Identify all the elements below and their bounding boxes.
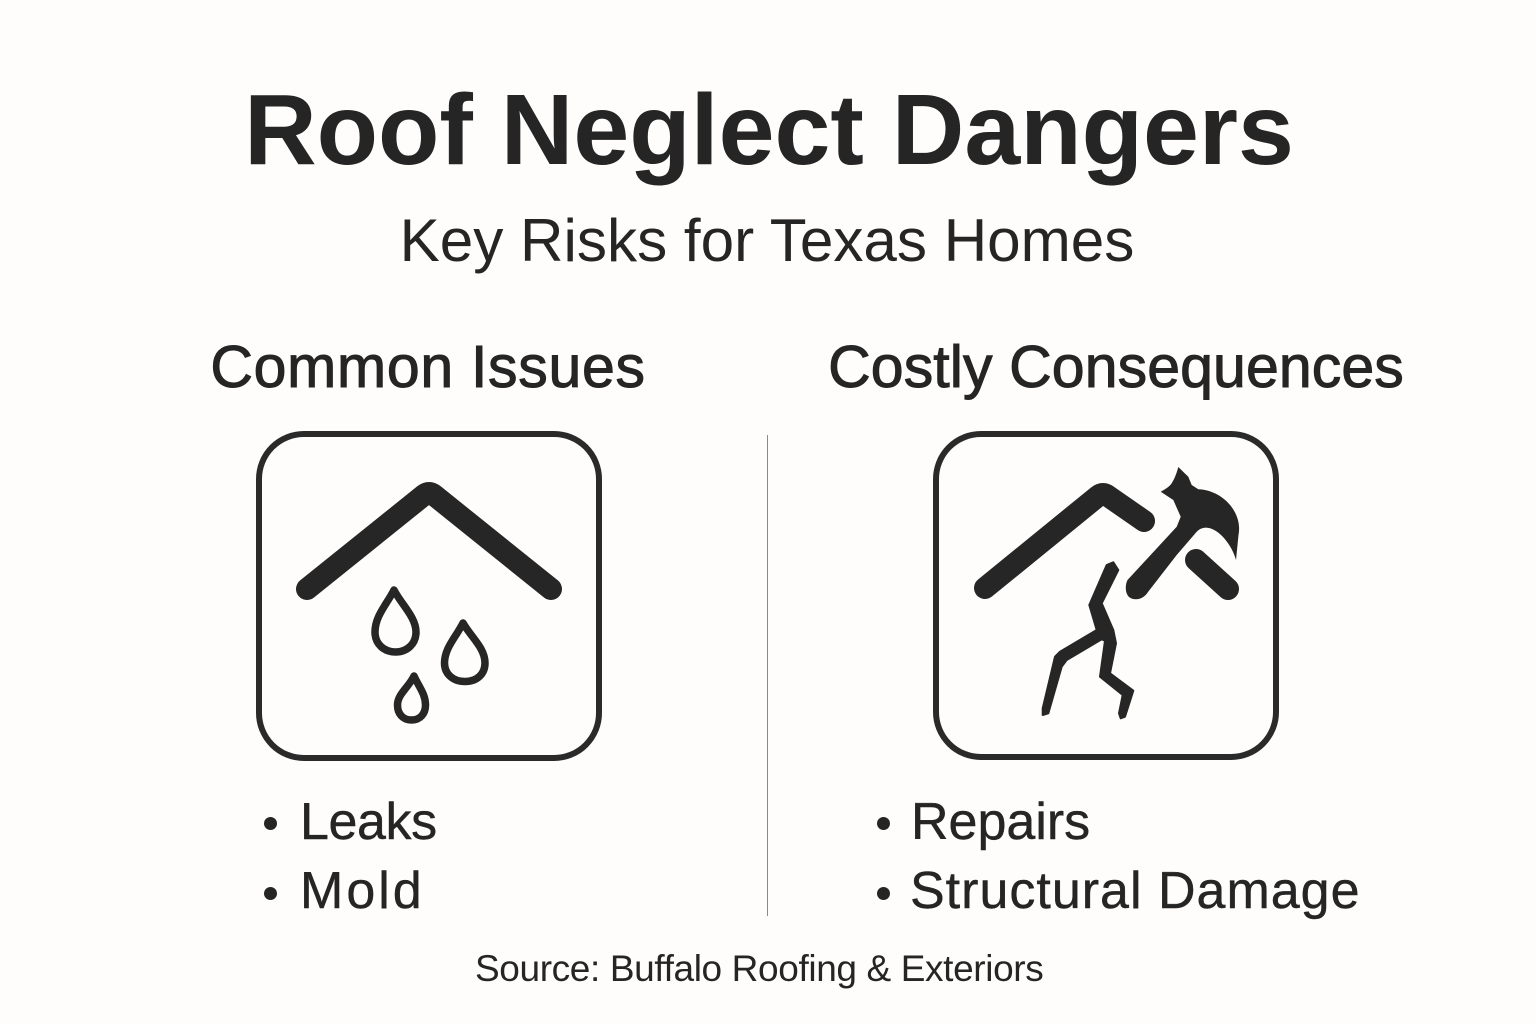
item: mold: Mold [300, 862, 425, 920]
list: common issues [264, 793, 437, 920]
list: costly consequences [877, 793, 1361, 920]
bullet: structural damage [877, 887, 890, 900]
heading: costly consequences: Costly Consequences [828, 334, 1404, 400]
bullet: mold [264, 887, 277, 900]
icon: damaged roof with hammer and crack [933, 431, 1279, 760]
item: structural damage: Structural Damage [910, 862, 1361, 920]
bullet: leaks [264, 817, 277, 830]
heading: common issues: Common Issues [210, 334, 646, 400]
bullet: repairs [877, 817, 890, 830]
item: leaks: Leaks [300, 793, 437, 851]
title: Roof Neglect Dangers [244, 74, 1294, 186]
subtitle: Key Risks for Texas Homes [400, 207, 1134, 274]
source note: Source: Buffalo Roofing & Exteriors [475, 948, 1043, 989]
center divider [767, 435, 768, 916]
icon: roof with water drops [256, 431, 602, 761]
item: repairs: Repairs [911, 793, 1090, 851]
